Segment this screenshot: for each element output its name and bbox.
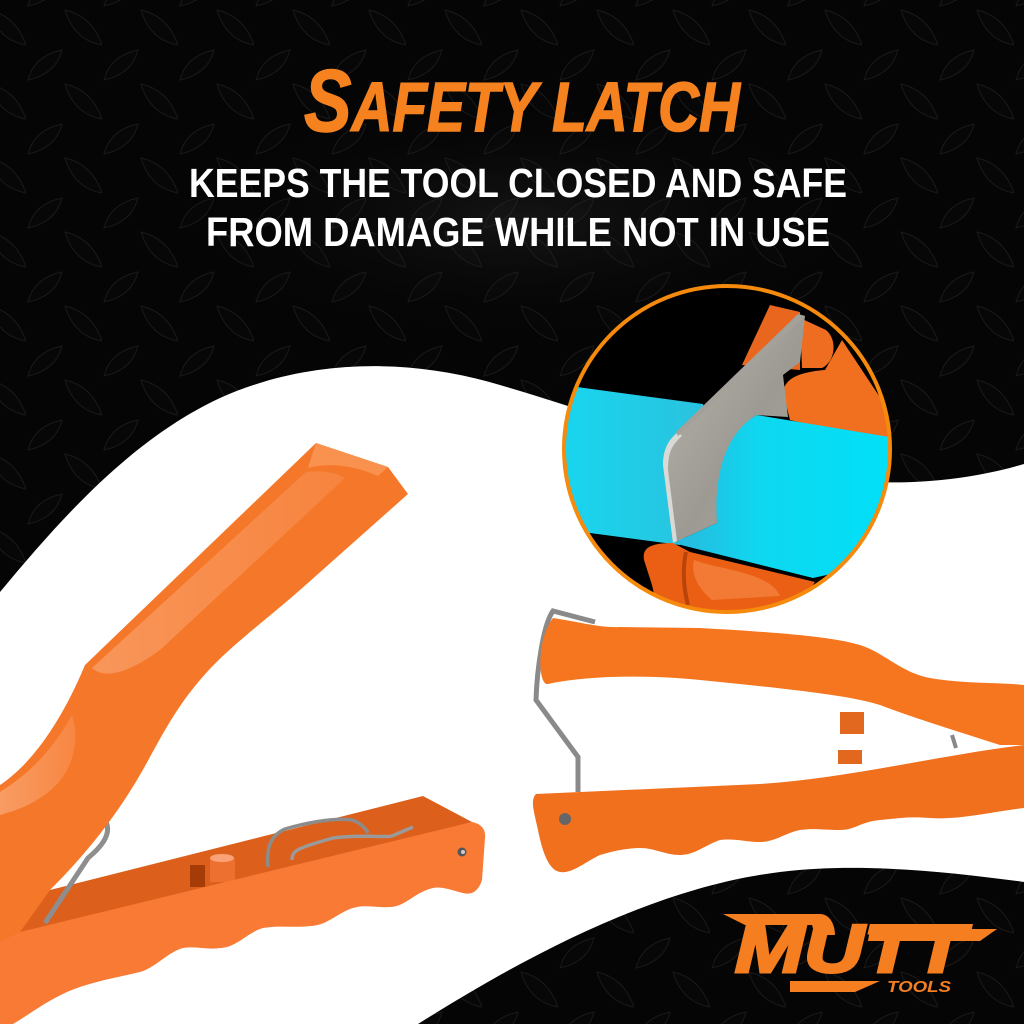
inner tray xyxy=(0,796,472,950)
white wave panel xyxy=(0,366,1024,1024)
upper arm xyxy=(0,443,408,960)
left tool: open handle xyxy=(0,443,485,1024)
inset circle: blade cutting pipe xyxy=(555,286,895,620)
logo xyxy=(723,911,997,996)
spring wire xyxy=(45,822,108,923)
lower arm xyxy=(533,745,1024,872)
upper bracket xyxy=(742,305,800,370)
title: SAFETY LATCH xyxy=(304,51,741,150)
right pipe xyxy=(673,415,895,578)
subtitle xyxy=(189,160,847,255)
upper arm xyxy=(540,618,1024,745)
latch wires xyxy=(268,819,368,867)
blade xyxy=(663,314,805,543)
logo: TOOLS xyxy=(887,979,951,996)
wire latch xyxy=(536,611,595,792)
lower handle xyxy=(0,822,485,1024)
pegs xyxy=(840,712,864,734)
logo: MUTT xyxy=(735,911,972,987)
lower bracket xyxy=(644,543,815,610)
subtitle: KEEPS THE TOOL CLOSED AND SAFE xyxy=(189,160,847,206)
peg xyxy=(190,865,205,887)
right tool: closed handle xyxy=(533,611,1024,872)
left pipe xyxy=(566,387,704,545)
subtitle: FROM DAMAGE WHILE NOT IN USE xyxy=(206,209,830,255)
